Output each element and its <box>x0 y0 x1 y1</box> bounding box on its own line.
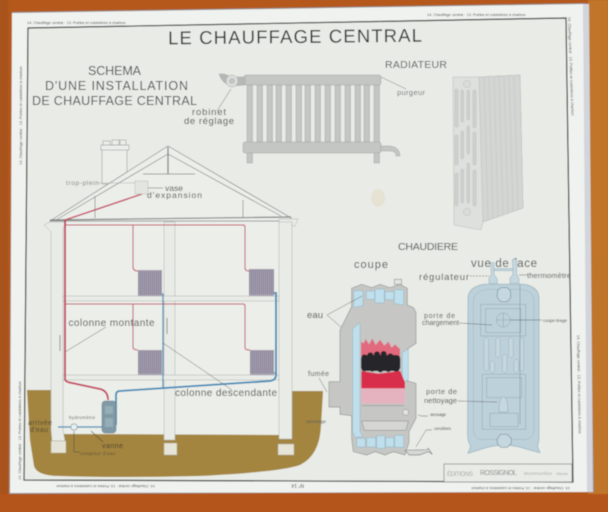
margin captions: 14. Chauffage central · 13. Poêles et cuisinières à charbon <box>576 335 582 434</box>
fins <box>484 338 524 373</box>
grate and ash pit <box>362 406 409 430</box>
label: vase d'expansion <box>147 183 202 200</box>
title: LE CHAUFFAGE CENTRAL <box>168 25 422 48</box>
label: trop-plein: trop-plein <box>66 180 99 187</box>
label: porte de chargement: chargement <box>422 320 459 327</box>
publisher box: Montmorillon <box>524 471 552 476</box>
label: colonne descendante <box>163 318 277 399</box>
radiator columns <box>247 85 380 163</box>
label: hydrometre: hydromètre <box>69 415 95 420</box>
label: ramonage: ramonage <box>306 419 326 424</box>
margin captions: N° 14 <box>291 482 304 488</box>
radiators in house <box>138 269 274 375</box>
label: coupe-tirage: coupe-tirage <box>543 318 567 323</box>
label: porte de chargement: porte de <box>424 313 455 320</box>
publisher box: ROSSIGNOL <box>480 470 517 477</box>
label: arrivee d'eau: arrivée <box>28 420 52 427</box>
label: fumee: fumée <box>308 371 329 378</box>
heading: schema: SCHEMA <box>88 64 142 78</box>
margin captions: 14. Chauffage central · 13. Poêles et cuisinières à charbon <box>19 66 23 165</box>
label: compteur d'eau: compteur d'eau <box>80 451 115 456</box>
heading: schema <box>32 64 197 108</box>
heading: vue de face: vue de face <box>471 258 537 270</box>
label: colonne montante <box>60 318 155 352</box>
walls and pillars <box>44 219 298 441</box>
red supply pipes <box>65 194 250 400</box>
margin captions: 14. Chauffage central · 13. Poêles et cuisinières à charbon <box>18 381 22 480</box>
ash tray <box>405 448 432 455</box>
house interior <box>65 222 279 434</box>
label: porte de nettoyage <box>424 387 497 405</box>
label: purgeur: purgeur <box>397 88 426 97</box>
label: robinet de reglage: de réglage <box>184 116 234 127</box>
top plug <box>497 288 511 302</box>
heading: schema: D'UNE INSTALLATION <box>45 79 188 93</box>
label: colonne descendante: colonne descendante <box>175 388 277 399</box>
label: cendriers: cendriers <box>434 426 452 431</box>
label: coupe-tirage <box>510 318 567 323</box>
inner casing line <box>473 289 534 440</box>
soil <box>27 390 323 477</box>
radiator perspective view <box>453 75 523 230</box>
small boiler <box>102 401 116 433</box>
label: fumee <box>308 371 329 392</box>
heading: coupe: coupe <box>354 259 388 271</box>
margin captions: 14. Chauffage central · 13. Poêles et cuisinières à charbon <box>471 486 570 490</box>
ash bed <box>361 388 405 404</box>
label: secouage <box>418 412 446 417</box>
label: robinet de reglage <box>184 89 234 127</box>
coal <box>361 351 400 372</box>
margin captions: 14. Chauffage central · 13. Poêles et cuisinières à charbon <box>56 484 155 488</box>
publisher box <box>444 464 572 482</box>
footings <box>51 441 294 455</box>
label: porte de nettoyage: porte de <box>426 387 457 396</box>
label: robinet de reglage: robinet <box>192 107 226 118</box>
boiler casing <box>468 284 540 453</box>
margin captions: 14. Chauffage central · 13. Poêles et cuisinières à charbon <box>427 13 526 17</box>
charging door <box>481 304 526 336</box>
label: arrivee d'eau <box>28 420 52 434</box>
face slots <box>455 89 476 206</box>
fins <box>484 76 518 220</box>
margin captions: 14. Chauffage central · 13. Poêles et cuisinières à charbon <box>567 17 574 116</box>
boiler front view <box>468 259 540 453</box>
cleaning door <box>482 284 526 429</box>
label: regulateur: régulateur <box>419 272 469 283</box>
label: vase d'expansion: d'expansion <box>147 190 202 200</box>
bottom plug <box>497 434 511 447</box>
publisher box: Vienne <box>556 471 569 476</box>
boiler cross-section <box>329 279 432 455</box>
roof <box>50 146 291 221</box>
label: colonne montante: colonne montante <box>68 318 155 329</box>
publisher box: ÉDITIONS <box>447 471 473 478</box>
heading: radiateur: RADIATEUR <box>385 59 447 71</box>
flames <box>361 338 400 357</box>
label: arrivee d'eau: d'eau <box>30 427 48 434</box>
label: thermometre: thermomètre <box>527 271 571 280</box>
label: vase d'expansion: vase <box>165 183 183 193</box>
label: eau: eau <box>307 310 323 321</box>
label: eau <box>307 296 362 327</box>
label: cendriers <box>416 426 452 447</box>
margin captions: 14. Chauffage central · 13. Poêles et cuisinières à charbon <box>27 21 126 25</box>
label: vanne <box>91 431 123 450</box>
label: trop-plein <box>66 180 135 187</box>
blue return pipes <box>58 293 276 427</box>
water jacket <box>353 289 408 448</box>
boiler body <box>329 284 416 455</box>
label: porte de chargement <box>422 313 492 327</box>
heading: schema: DE CHAUFFAGE CENTRAL <box>32 94 197 108</box>
house section <box>44 140 298 455</box>
label: vanne: vanne <box>102 443 123 450</box>
chimney <box>101 140 129 184</box>
radiator front view <box>219 74 400 163</box>
label: purgeur <box>381 77 426 97</box>
heading: chaudiere: CHAUDIERE <box>398 241 458 253</box>
water meter <box>71 424 77 430</box>
label: compteur d'eau <box>74 431 115 456</box>
label: porte de nettoyage: nettoyage <box>424 396 457 405</box>
label: secouage: secouage <box>430 412 446 417</box>
top connectors <box>489 259 519 283</box>
expansion tank <box>135 181 148 194</box>
embers <box>361 371 405 389</box>
